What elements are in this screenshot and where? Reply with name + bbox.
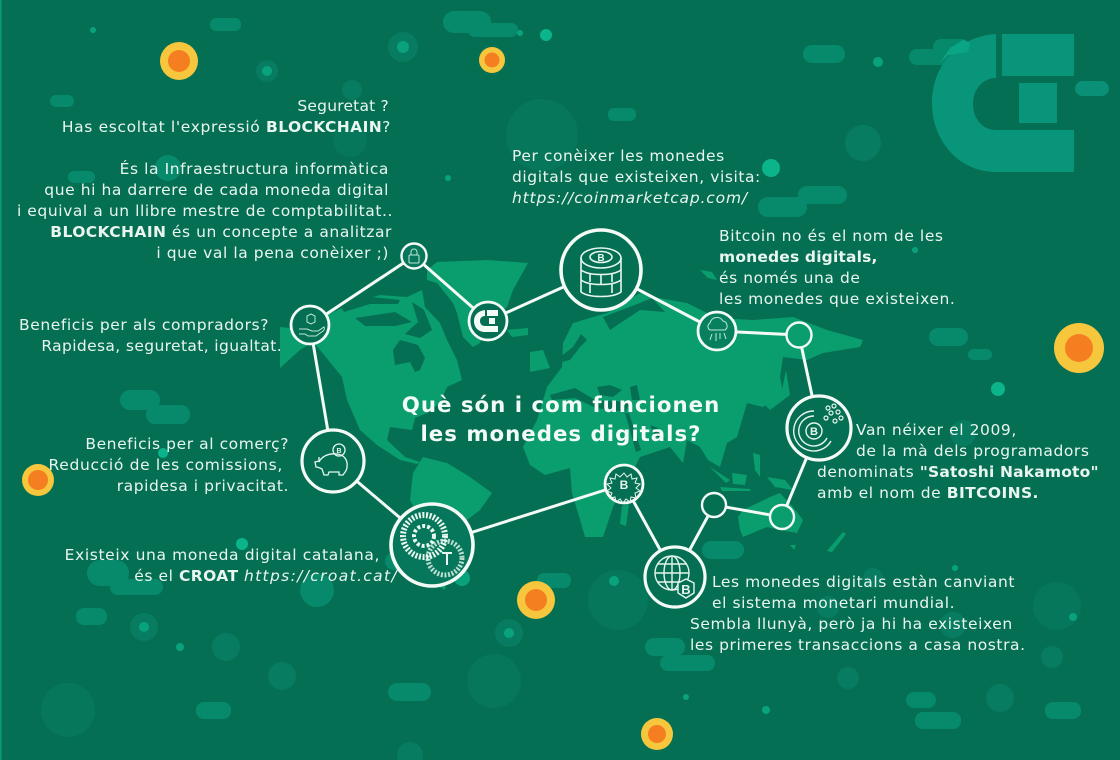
text: blockchain: i equival a un llibre mestre de comptabilitat..: [17, 202, 393, 220]
text: satoshi: [817, 421, 1099, 502]
text: buyers benefits: Rapidesa, seguretat, igualtat.: [41, 337, 282, 355]
node: globe: [645, 547, 705, 607]
mediterranean: [550, 388, 630, 412]
node: bitcoin spiral: B: [810, 426, 818, 438]
text: blockchain: Seguretat ?: [297, 97, 389, 115]
indonesia: [710, 453, 793, 491]
text: blockchain: BLOCKCHAIN és un concepte a analitzar: [50, 223, 392, 241]
text: croat: [65, 546, 398, 585]
world map: [280, 260, 863, 590]
node: logo: [469, 302, 507, 340]
uk: [530, 350, 550, 372]
node: star coin: B: [620, 478, 629, 492]
text: bitcoin: les monedes que existeixen.: [719, 290, 955, 308]
node: empty australia: [770, 505, 794, 529]
node: globe: B: [681, 582, 691, 597]
logo watermark: [932, 34, 1074, 172]
node: cloud: [698, 312, 736, 350]
black and caspian seas: [597, 385, 640, 400]
node: piggy bank: [302, 430, 364, 492]
network connections: [310, 256, 819, 577]
node: coin stack: [561, 230, 641, 310]
text: satoshi: Van néixer el 2009,: [856, 421, 1017, 439]
text: monetary system: el sistema monetari mundial.: [712, 594, 955, 612]
title: Què són i com funcionen: [402, 393, 720, 418]
text: satoshi: denominats "Satoshi Nakamoto": [817, 463, 1099, 481]
hudson bay: [393, 340, 425, 372]
text: blockchain: que hi ha darrere de cada moneda digital: [44, 181, 389, 199]
text: bitcoin: és només una de: [719, 269, 860, 287]
north america: [280, 290, 462, 464]
node: star coin: [605, 465, 643, 503]
text: monetary system: Sembla llunyà, però ja hi ha existeixen: [690, 615, 1013, 633]
text: coinmarketcap: Per conèixer les monedes: [512, 147, 725, 165]
text: blockchain: i que val la pena conèixer ;): [156, 244, 389, 262]
text: monetary system: les primeres transaccions a casa nostra.: [690, 636, 1026, 654]
japan: [765, 370, 790, 410]
text: blockchain: [17, 97, 393, 262]
node: bitcoin spiral: [787, 396, 851, 460]
text: blockchain: Has escoltat l'expressió BLOCKCHAIN?: [62, 118, 391, 136]
text: buyers benefits: [19, 316, 282, 355]
text: bitcoin: monedes digitals,: [719, 248, 878, 266]
arctic channels: [340, 297, 432, 338]
text: bitcoin: [719, 227, 955, 308]
red sea and gulf: [625, 413, 665, 452]
text: coinmarketcap: https://coinmarketcap.com/: [512, 189, 748, 207]
title: les monedes digitals?: [420, 422, 702, 447]
south america: [410, 457, 492, 590]
kara sea: [603, 298, 665, 330]
node: lock: [402, 244, 426, 268]
text: buyers benefits: Beneficis per als compradors?: [19, 316, 269, 334]
text: satoshi: amb el nom de BITCOINS.: [817, 484, 1039, 502]
australia: [738, 493, 803, 537]
node: empty ocean: [702, 493, 726, 517]
iceland: [507, 328, 528, 337]
node: croat coins: [391, 504, 473, 586]
eurasia and africa: [523, 293, 863, 537]
madagascar: [620, 504, 629, 526]
text: commerce benefits: Reducció de les comissions,: [49, 456, 283, 474]
node: coin stack: B: [597, 253, 605, 264]
baltic: [557, 334, 587, 363]
text: croat: Existeix una moneda digital catalana,: [65, 546, 380, 564]
text: bitcoin: Bitcoin no és el nom de les: [719, 227, 944, 245]
text: coinmarketcap: [512, 147, 761, 207]
greenland: [427, 260, 528, 347]
text: monetary system: [690, 573, 1026, 654]
text: croat: és el CROAT https://croat.cat/: [134, 567, 398, 585]
novaya zemlya: [700, 270, 717, 280]
new zealand: [790, 532, 846, 552]
text: blockchain: És la Infraestructura informàtica: [120, 160, 389, 178]
node: piggy bank: B: [336, 448, 342, 455]
text: satoshi: de la mà dels programadors: [856, 442, 1090, 460]
node: hand with coin: [291, 306, 329, 344]
text: commerce benefits: rapidesa i privacitat.: [117, 477, 289, 495]
pills on logo: [940, 40, 1109, 96]
text: monetary system: Les monedes digitals estàn canviant: [712, 573, 1015, 591]
text: commerce benefits: [49, 435, 289, 495]
text: commerce benefits: Beneficis per al comerç?: [85, 435, 289, 453]
title: [402, 393, 720, 447]
south china sea: [737, 445, 750, 470]
node: empty north asia: [786, 322, 812, 348]
text: coinmarketcap: digitals que existeixen, visita:: [512, 168, 761, 186]
